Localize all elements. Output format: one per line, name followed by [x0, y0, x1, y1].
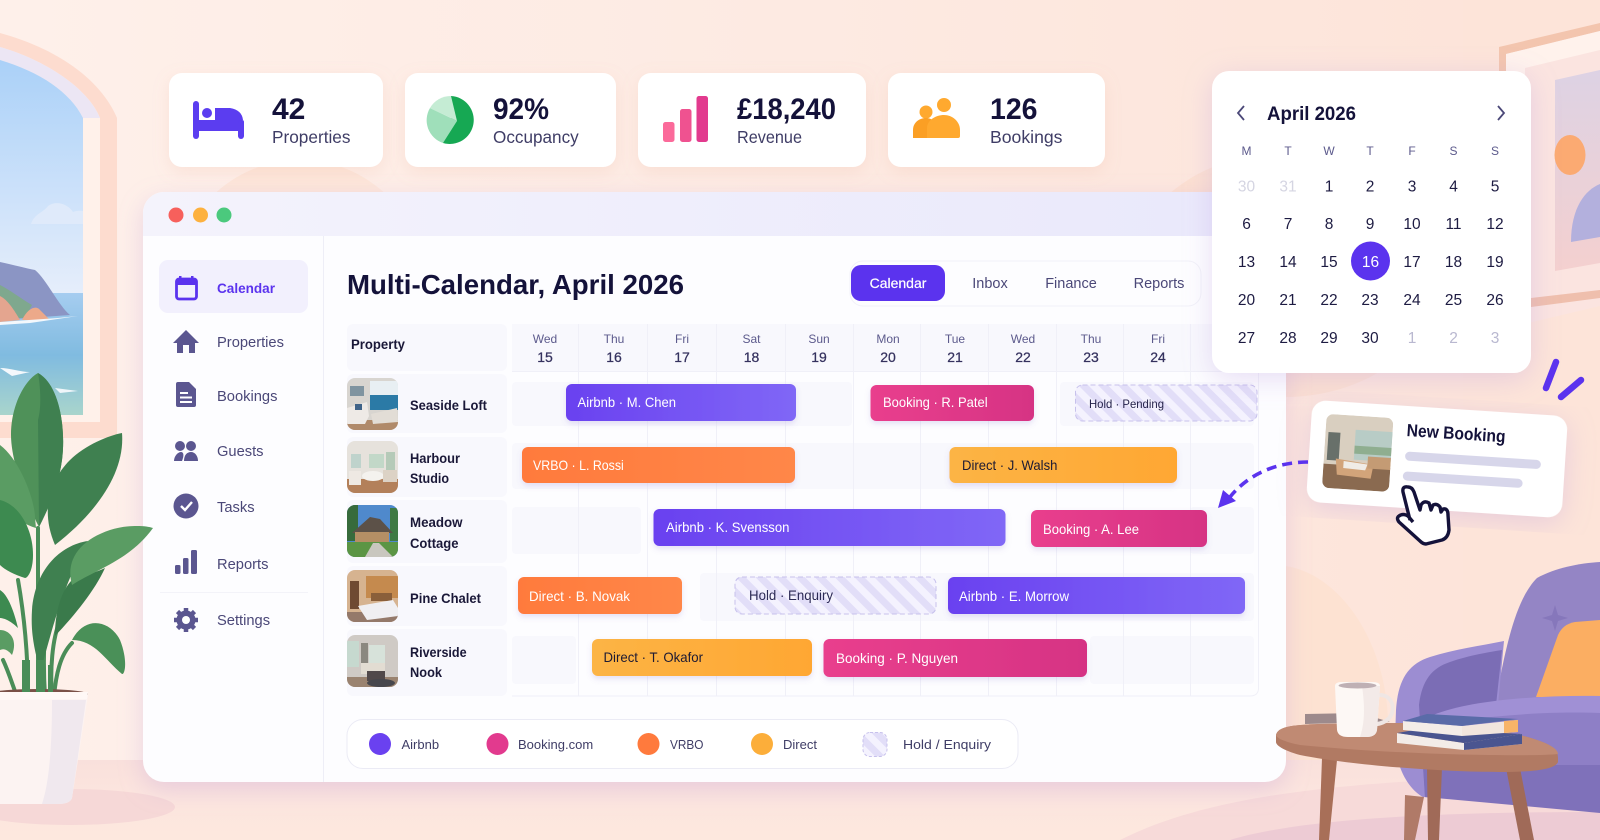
date grid: 24 — [1403, 292, 1421, 309]
date grid: 9 — [1366, 216, 1374, 233]
icon: bed — [193, 101, 244, 139]
date grid: 18 — [1445, 254, 1462, 271]
booking bar: Direct B. Novak: Direct · B. Novak — [529, 588, 631, 604]
selected date 16: 16 — [1362, 254, 1379, 271]
nav item: tasks: Tasks — [217, 500, 255, 516]
stat card: occupancy — [405, 73, 616, 167]
new booking card — [1306, 400, 1568, 544]
date header row: 16 — [606, 349, 622, 365]
nav item: guests — [174, 441, 264, 461]
nav item: settings: Settings — [217, 613, 270, 629]
icon: occupancy pie — [427, 96, 474, 144]
legend: Booking.com — [518, 737, 593, 752]
armchair — [1395, 562, 1600, 840]
date header row: 20 — [880, 349, 896, 365]
date grid: 7 — [1284, 216, 1292, 233]
booking bar: Hold Enquiry: Hold · Enquiry — [749, 587, 833, 603]
thumbnail: Riverside Nook — [347, 635, 398, 688]
date grid: 31 — [1279, 178, 1297, 196]
weekday labels — [1242, 144, 1499, 158]
date grid: 29 — [1320, 330, 1338, 347]
new booking card: New Booking — [1406, 420, 1506, 446]
date header row: Fri — [675, 332, 689, 346]
date header row: Sat — [742, 332, 761, 346]
side table with mug and books — [1276, 682, 1558, 840]
view tabs: Inbox — [972, 276, 1008, 292]
date header row: Wed — [1011, 332, 1035, 346]
nav item: guests: Guests — [217, 444, 264, 460]
thumbnail: Pine Chalet — [347, 570, 398, 622]
date grid — [1238, 178, 1504, 347]
date header row: 19 — [811, 349, 827, 365]
calendar grid — [347, 324, 1258, 696]
weekday labels: S — [1449, 144, 1458, 158]
date header row: Wed — [533, 332, 557, 346]
booking bar: Direct J. Walsh: Direct · J. Walsh — [962, 457, 1057, 473]
date grid: 26 — [1486, 292, 1504, 309]
nav item: reports — [175, 550, 268, 574]
legend: Direct — [783, 737, 817, 752]
row: Harbour Studio — [347, 441, 461, 493]
thumbnail: Meadow Cottage — [347, 505, 398, 557]
stat card: properties — [169, 73, 383, 167]
date header row: 15 — [537, 349, 553, 365]
date grid: 17 — [1403, 254, 1421, 271]
date grid: 3 — [1408, 178, 1416, 196]
booking bar: VRBO L. Rossi: VRBO · L. Rossi — [533, 457, 624, 473]
date grid: 11 — [1445, 216, 1462, 233]
plant pot — [0, 692, 88, 804]
row: Riverside Nook: Riverside — [410, 644, 467, 660]
date grid: 8 — [1325, 216, 1333, 233]
date grid: 2 — [1449, 330, 1458, 347]
weekday labels: W — [1323, 144, 1335, 158]
date header row: 18 — [744, 349, 759, 365]
date grid: 27 — [1238, 330, 1255, 347]
date grid: 1 — [1408, 330, 1416, 347]
date grid: 30 — [1238, 178, 1255, 196]
nav item: bookings — [176, 382, 277, 407]
weekday labels: S — [1491, 144, 1499, 158]
row: Meadow Cottage — [347, 505, 463, 557]
row: Meadow Cottage: Cottage — [410, 535, 459, 551]
date header row: Thu — [604, 332, 624, 346]
date grid: 25 — [1445, 292, 1462, 309]
selected date 16 — [1351, 242, 1390, 280]
row: Pine Chalet: Pine Chalet — [410, 590, 481, 606]
nav item: reports: Reports — [217, 557, 268, 573]
date grid: 14 — [1279, 254, 1297, 271]
date grid: 23 — [1361, 292, 1379, 309]
nav item: properties: Properties — [217, 335, 284, 351]
date grid: 4 — [1449, 178, 1458, 196]
booking bar: VRBO L. Rossi — [522, 447, 795, 483]
row: Seaside Loft: Seaside Loft — [410, 397, 487, 413]
stat card: properties: 42 — [272, 93, 305, 126]
booking bar: Direct T. Okafor — [592, 639, 812, 676]
booking bar: Hold Pending: Hold · Pending — [1089, 397, 1164, 411]
icon: hand cursor — [1398, 487, 1449, 544]
nav item: calendar (active) — [159, 260, 308, 313]
date grid: 6 — [1242, 216, 1251, 233]
wall art frame — [1499, 23, 1600, 330]
date grid: 19 — [1486, 254, 1504, 271]
icon: revenue bars — [663, 96, 708, 142]
date header row: 17 — [674, 349, 690, 365]
weekday labels: T — [1284, 144, 1292, 158]
nav item: properties — [173, 330, 284, 353]
date grid: 21 — [1279, 292, 1297, 309]
window title bar — [143, 192, 1286, 236]
date header row: Tue — [945, 332, 965, 346]
thumbnail: new booking room — [1322, 414, 1394, 492]
calendar header: April 2026 — [1267, 104, 1356, 125]
app window panel — [143, 192, 1286, 782]
booking bar: Booking R. Patel — [870, 385, 1034, 421]
thumbnail: Seaside Loft — [347, 378, 398, 430]
booking bar: Booking P. Nguyen — [824, 639, 1087, 677]
nav item: calendar (active): Calendar — [217, 281, 275, 297]
arched window with sea view — [0, 33, 117, 438]
date header row: 23 — [1083, 349, 1099, 365]
date header row: 24 — [1150, 349, 1166, 365]
date header row: Sun — [808, 332, 830, 346]
view tabs: Finance — [1045, 276, 1097, 292]
view tabs — [850, 261, 1201, 306]
legend: Hold / Enquiry — [903, 737, 992, 752]
booking bar: Direct J. Walsh — [950, 447, 1177, 483]
date grid: 12 — [1486, 216, 1504, 233]
dashed arrow to calendar — [1218, 462, 1308, 508]
sidebar navigation — [159, 260, 308, 632]
date header row: Mon — [876, 332, 900, 346]
row: Riverside Nook: Nook — [410, 664, 442, 680]
legend: Airbnb — [402, 737, 439, 752]
date grid: 13 — [1238, 254, 1255, 271]
booking bar: Direct B. Novak — [518, 577, 682, 614]
booking bar: Airbnb K. Svensson: Airbnb · K. Svensson — [666, 519, 790, 535]
row: Pine Chalet — [347, 570, 481, 622]
booking bar: Airbnb E. Morrow — [948, 577, 1245, 614]
stat card: bookings — [888, 73, 1105, 167]
calendar header — [1238, 104, 1504, 125]
date header row: Thu — [1081, 332, 1101, 346]
date grid: 2 — [1366, 178, 1374, 196]
mug — [1335, 682, 1393, 737]
date grid: 28 — [1279, 330, 1297, 347]
stat card: properties: Properties — [272, 127, 351, 147]
date grid: 15 — [1320, 254, 1338, 271]
date grid: 20 — [1238, 292, 1255, 309]
view tabs: Calendar — [870, 275, 927, 291]
weekday labels: F — [1408, 144, 1416, 158]
row: Harbour Studio: Harbour — [410, 450, 461, 466]
date grid: 5 — [1491, 178, 1499, 196]
date grid: 1 — [1325, 178, 1333, 196]
pillow — [1536, 620, 1600, 697]
stat card: occupancy: Occupancy — [493, 127, 579, 147]
mini calendar panel — [1212, 71, 1531, 373]
booking bar: Direct T. Okafor: Direct · T. Okafor — [604, 649, 703, 665]
row: Meadow Cottage: Meadow — [410, 514, 463, 530]
date grid: 30 — [1361, 330, 1379, 347]
row: Seaside Loft — [347, 378, 487, 430]
thumbnail: Harbour Studio — [347, 441, 398, 493]
booking bar: Booking R. Patel: Booking · R. Patel — [883, 394, 988, 410]
stat card: revenue — [638, 73, 866, 167]
booking bar: Airbnb M. Chen: Airbnb · M. Chen — [578, 394, 676, 410]
booking bar: Booking A. Lee: Booking · A. Lee — [1043, 521, 1139, 537]
row: Riverside Nook — [347, 635, 467, 688]
booking bar: Airbnb E. Morrow: Airbnb · E. Morrow — [959, 588, 1070, 604]
date header row: Fri — [1151, 332, 1165, 346]
booking bar: Hold Pending — [1076, 385, 1257, 421]
legend — [347, 720, 1018, 768]
weekday labels: M — [1242, 144, 1252, 158]
row: Harbour Studio: Studio — [410, 470, 449, 486]
stat card: bookings: 126 — [990, 93, 1038, 126]
date header row: Property — [351, 337, 405, 352]
date grid: 3 — [1491, 330, 1499, 347]
booking bar: Hold Enquiry — [735, 577, 936, 614]
weekday labels: T — [1366, 144, 1374, 158]
booking bar: Airbnb M. Chen — [566, 384, 796, 421]
date grid: 22 — [1320, 292, 1338, 309]
stat card: occupancy: 92% — [493, 93, 549, 126]
booking bar: Booking P. Nguyen: Booking · P. Nguyen — [836, 650, 958, 666]
date header row: 21 — [947, 349, 963, 365]
date grid: 10 — [1403, 216, 1421, 233]
date header row: 22 — [1015, 349, 1031, 365]
stat card: bookings: Bookings — [990, 127, 1063, 147]
books — [1397, 714, 1522, 750]
stat card: revenue: £18,240 — [737, 93, 836, 126]
booking bar: Booking A. Lee — [1031, 510, 1207, 547]
accent sparks — [1546, 362, 1581, 397]
legend: VRBO — [670, 737, 704, 752]
stat card: revenue: Revenue — [737, 127, 802, 147]
nav item: tasks — [174, 494, 255, 518]
nav item: bookings: Bookings — [217, 389, 277, 405]
date header row — [347, 324, 1258, 371]
icon: people — [913, 98, 960, 138]
potted plant — [0, 373, 153, 804]
nav item: settings — [174, 608, 270, 632]
booking bar: Airbnb K. Svensson — [654, 509, 1006, 546]
heading: Multi-Calendar, April 2026 — [347, 269, 684, 300]
view tabs: Reports — [1134, 276, 1184, 292]
